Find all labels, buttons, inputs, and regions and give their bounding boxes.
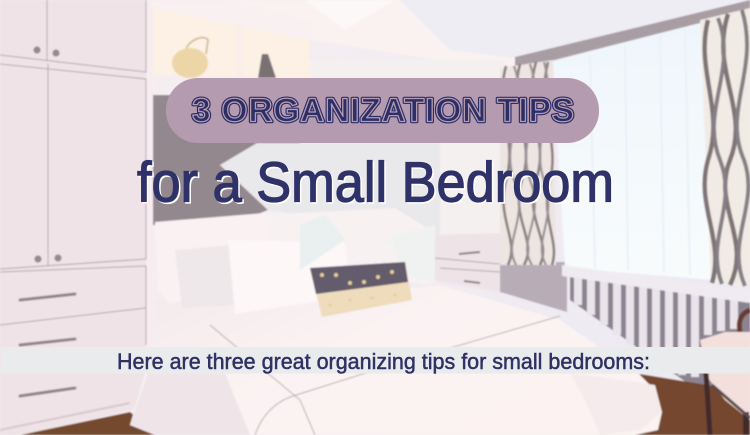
left patterned curtain	[500, 60, 556, 265]
woven basket ornament	[172, 38, 208, 78]
tips subtitle strip	[1, 347, 750, 374]
wardrobe and drawers	[0, 0, 155, 435]
curtain rail band	[515, 0, 750, 70]
bed with white duvet	[130, 285, 662, 435]
floral armchair	[700, 310, 750, 435]
pale triangle accents over pillows	[300, 215, 435, 285]
figurine	[258, 54, 276, 78]
pill heading double-line text: 3 ORGANIZATION TIPS	[192, 92, 574, 130]
cabinet knobs	[33, 46, 62, 263]
main title: for a Small Bedroom	[137, 150, 614, 214]
wood floor	[20, 374, 750, 435]
radiator	[562, 265, 750, 395]
pillows	[155, 208, 430, 314]
right patterned curtain	[700, 8, 750, 287]
drawer handles	[20, 294, 75, 396]
intro sentence: Here are three great organizing tips for small bedrooms:	[117, 349, 650, 374]
grey headboard	[153, 95, 300, 225]
pale translucent triangles	[220, 0, 440, 235]
main title: for a Small Bedroom	[138, 152, 616, 216]
polka dot cushion	[310, 262, 412, 317]
pill heading double-line text: 3 ORGANIZATION TIPS	[192, 92, 574, 130]
heading pill	[166, 78, 599, 143]
nightstand	[432, 233, 500, 292]
window with sheer curtain	[553, 20, 715, 280]
lit shelf niche	[150, 0, 312, 100]
